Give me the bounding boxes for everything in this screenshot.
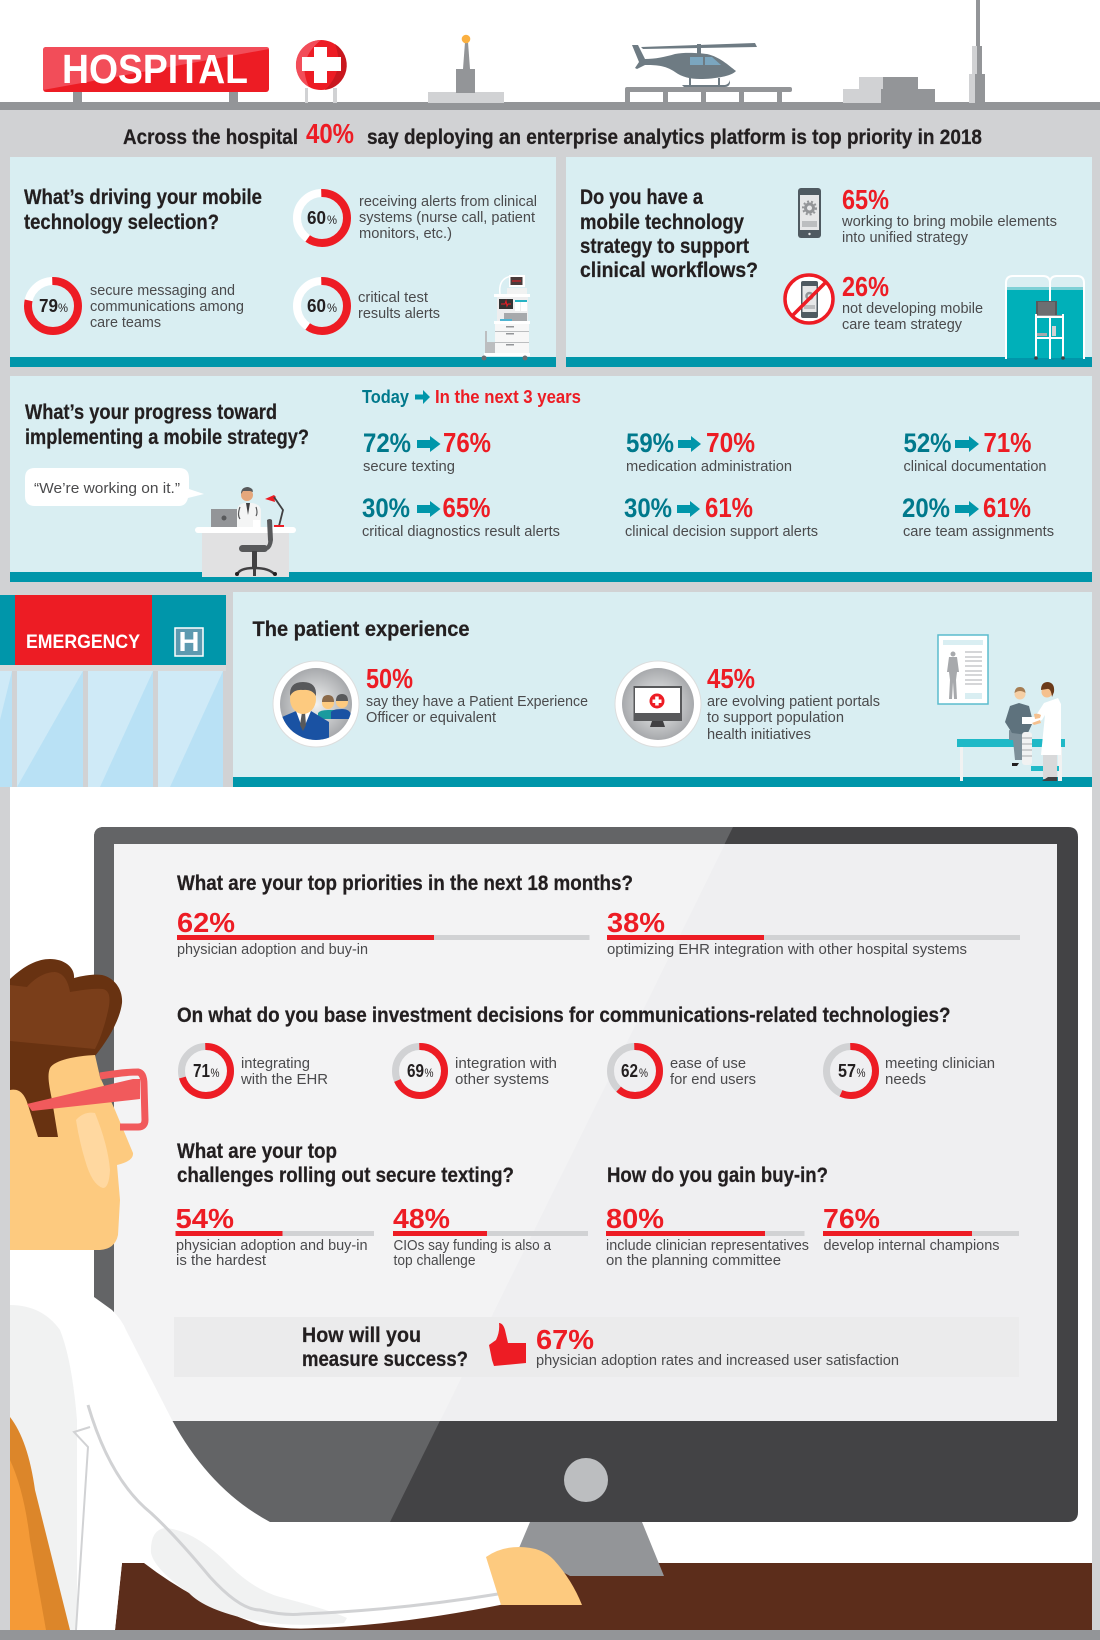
monitor <box>94 827 1078 1522</box>
stat: decision support alerts: 61% <box>705 492 753 523</box>
stat: 26%: not developing mobile <box>842 300 983 317</box>
stat: 26% <box>842 271 983 333</box>
stat: clinical documentation: 52% <box>904 428 952 458</box>
hair <box>10 959 122 1140</box>
text: critical test results <box>358 289 440 322</box>
icon: red cross sign <box>296 40 347 103</box>
section: investment decisions <box>177 1004 995 1096</box>
stat bar: 48% <box>393 1203 588 1269</box>
stat bar: 48%: 48% <box>393 1203 450 1234</box>
icon: camera dot <box>564 1458 608 1502</box>
stat: decision support alerts: clinical decision support alerts <box>625 523 818 540</box>
callout: measuring success: measure success? <box>302 1348 468 1371</box>
donut: 60% test results: 60 <box>307 296 326 316</box>
text: clinical system alerts: receiving alerts from clinical <box>359 193 537 210</box>
stat: medication administration: 70% <box>706 427 755 458</box>
stat bar: 54%: physician adoption and buy-in <box>176 1237 368 1254</box>
callout: measuring success <box>174 1317 1019 1377</box>
section: secure texting challenges: What are your top <box>177 1140 337 1163</box>
stat: medication administration: medication administration <box>626 458 792 475</box>
legend: today to next 3 years: Today <box>362 387 409 407</box>
panel: mobile technology strategy <box>566 157 1092 367</box>
donut: 69%: % <box>424 1066 434 1080</box>
stat bar: 80%: on the planning committee <box>606 1252 781 1269</box>
stat: medication administration <box>626 427 792 475</box>
text: secure messaging: communications among <box>90 298 244 315</box>
monitor stand <box>519 1522 664 1576</box>
donut: 71% <box>182 1046 230 1096</box>
emergency entrance <box>0 595 226 787</box>
text: clinical system alerts <box>359 193 537 242</box>
stat: 45%: 45% <box>707 663 755 694</box>
stat: care team assignments: care team assignments <box>903 523 1054 540</box>
donut: 60% alerts: 60 <box>307 208 326 228</box>
emergency entrance: EMERGENCY <box>26 632 140 653</box>
cheek highlight <box>76 1113 110 1188</box>
stat bar: 54%: is the hardest <box>176 1252 267 1269</box>
label: integrating with the EHR: integrating <box>241 1055 310 1072</box>
donut: 57%: % <box>856 1066 866 1080</box>
stat: care team assignments: 61% <box>983 492 1031 523</box>
title: 40% <box>306 118 354 149</box>
illustration: doctor viewing the monitor <box>10 959 582 1630</box>
section: investment decisions: On what do you base investment decisions for communications-related technologies? <box>177 1004 950 1027</box>
heading <box>24 186 262 234</box>
label: meeting clinician needs <box>885 1055 995 1088</box>
text: secure messaging: care teams <box>90 314 161 331</box>
glasses <box>27 1072 145 1127</box>
text: clinical system alerts: systems (nurse call, patient <box>359 209 536 226</box>
section: gaining buy-in <box>606 1164 1019 1269</box>
section: secure texting challenges <box>176 1140 588 1269</box>
stat: clinical documentation <box>904 427 1046 475</box>
stat: clinical documentation: clinical documentation <box>904 458 1046 475</box>
skyline: buildings <box>843 77 935 103</box>
icon: patient portal monitor <box>615 661 701 747</box>
icon: crossed-out smartphone <box>785 275 833 323</box>
stat: 50%: Officer or equivalent <box>366 709 497 726</box>
donut: 69%: 69 <box>407 1061 424 1081</box>
donut: 79% messaging: % <box>58 301 68 315</box>
panel: mobile technology selection <box>10 157 556 367</box>
donut: 62%: 62 <box>621 1061 638 1081</box>
stat bar: 80%: include clinician representatives <box>606 1237 809 1254</box>
stat: 65%: into unified strategy <box>842 229 968 246</box>
donut: 69% <box>396 1046 444 1096</box>
stat: 50% <box>366 663 588 726</box>
text: secure messaging <box>90 282 244 331</box>
stat bar: 62% <box>177 907 590 958</box>
label: ease of use for end users: for end users <box>670 1071 756 1088</box>
stat: diagnostics alerts <box>362 492 560 540</box>
heading: The patient experience <box>252 618 470 641</box>
stat: secure texting: 76% <box>443 427 491 458</box>
heading: What’s your progress toward <box>25 401 277 424</box>
panel: progress toward mobile strategy <box>10 376 1092 582</box>
speech bubble: “We’re working on it.” <box>34 480 180 497</box>
label: integration with other systems: integration with <box>455 1055 557 1072</box>
skyline: helipad with helicopter <box>625 43 792 103</box>
stat: decision support alerts: 30% <box>624 493 672 523</box>
panel: patient experience <box>233 592 1092 787</box>
label: integration with other systems <box>455 1055 557 1088</box>
stat: 50%: 50% <box>366 663 413 694</box>
illustration: anatomy poster <box>938 635 988 704</box>
head and neck <box>10 1055 133 1250</box>
donut: 57%: 57 <box>838 1061 856 1081</box>
stat: 65%: 65% <box>842 184 889 215</box>
heading: technology selection? <box>24 211 219 234</box>
heading <box>580 186 758 282</box>
stat: diagnostics alerts: 65% <box>442 492 491 523</box>
stat bar: 48%: CIOs say funding is also a <box>394 1237 552 1254</box>
stat: diagnostics alerts: 30% <box>362 493 410 523</box>
stat bar: 38%: optimizing EHR integration with other hospital systems <box>607 941 967 958</box>
icon: anesthesia cart <box>482 275 530 360</box>
stat: 26%: care team strategy <box>842 316 962 333</box>
icon: curtain and equipment table <box>1006 276 1084 360</box>
stat: 50%: say they have a Patient Experience <box>366 693 588 710</box>
icon: executives in circle <box>273 661 359 747</box>
title <box>123 118 982 149</box>
title: Across the hospital <box>123 126 298 149</box>
stat: 45%: health initiatives <box>707 726 811 743</box>
stat bar: 80%: 80% <box>606 1203 664 1234</box>
label: integrating with the EHR <box>240 1055 328 1088</box>
skyline: mast <box>969 0 985 103</box>
heading: strategy to support <box>580 235 749 258</box>
donut: 60% test results <box>297 281 347 331</box>
stat: 67%: physician adoption rates and increased user satisfaction <box>536 1352 899 1369</box>
stat bar: 38% <box>607 907 1020 958</box>
stat: secure texting <box>363 427 491 475</box>
stat: secure texting: secure texting <box>363 458 455 475</box>
donut: 57% <box>826 1046 876 1096</box>
section: top priorities <box>177 872 1020 958</box>
stat: 45%: are evolving patient portals <box>707 693 880 710</box>
text: critical test results: results alerts <box>358 305 440 322</box>
label: ease of use for end users: ease of use <box>670 1055 746 1072</box>
section: top priorities: What are your top priorities in the next 18 months? <box>177 872 633 895</box>
stat: medication administration: 59% <box>626 428 674 458</box>
skyline: antenna tower <box>428 35 504 103</box>
donut: 60% alerts <box>297 193 347 243</box>
callout: measuring success: How will you <box>302 1324 421 1347</box>
stat: 45% <box>707 663 880 743</box>
text: clinical system alerts: monitors, etc.) <box>359 225 452 242</box>
heading: Do you have a <box>580 186 703 209</box>
donut: 62%: % <box>639 1066 648 1080</box>
skyline: ground strip <box>0 102 1100 110</box>
stat: 65% <box>841 184 1057 246</box>
legend: today to next 3 years: In the next 3 years <box>435 387 581 407</box>
legend: today to next 3 years <box>362 387 581 407</box>
stat bar: 62%: physician adoption and buy-in <box>177 941 368 958</box>
stat: diagnostics alerts: critical diagnostics result alerts <box>362 523 560 540</box>
stat bar: 76% <box>823 1203 1019 1254</box>
white lower area <box>10 787 1092 1630</box>
emergency entrance: H <box>178 626 200 657</box>
stat bar: 38%: 38% <box>607 907 665 938</box>
label: integration with other systems: other systems <box>455 1071 549 1088</box>
stat: clinical documentation: 71% <box>984 427 1032 458</box>
donut: 79% messaging: 79 <box>39 296 58 316</box>
lab coat <box>10 1250 505 1630</box>
stat: 45%: to support population <box>707 709 844 726</box>
text: critical test results: critical test <box>358 289 429 306</box>
monitor screen <box>114 844 1057 1421</box>
illustration: doctor and patient <box>957 682 1065 781</box>
stat: 65%: working to bring mobile elements <box>841 213 1057 230</box>
stat: 67% <box>536 1324 899 1369</box>
stat bar: 54%: 54% <box>176 1203 234 1234</box>
bottom strip <box>0 1630 1100 1640</box>
stat bar: 76%: 76% <box>823 1203 880 1234</box>
donut: 60% alerts: % <box>327 213 337 227</box>
heading: clinical workflows? <box>580 259 758 282</box>
stat bar: 48%: top challenge <box>394 1252 476 1269</box>
icon: smartphone with gear <box>798 188 821 238</box>
stat: care team assignments <box>902 492 1054 540</box>
stat bar: 76%: develop internal champions <box>824 1237 1000 1254</box>
hand <box>486 1547 582 1605</box>
desk <box>115 1563 1092 1630</box>
donut: 71%: % <box>210 1066 220 1080</box>
title: say deploying an enterprise analytics platform is top priority in 2018 <box>367 126 982 149</box>
heading: mobile technology <box>580 211 744 234</box>
chair <box>10 1417 70 1630</box>
label: meeting clinician needs: needs <box>885 1071 926 1088</box>
donut: 71%: 71 <box>193 1061 210 1081</box>
stat bar: 80% <box>606 1203 809 1269</box>
stat bar: 62%: 62% <box>177 907 235 938</box>
speech bubble <box>25 468 204 506</box>
stat: secure texting: 72% <box>363 428 411 458</box>
label: ease of use for end users <box>670 1055 756 1088</box>
hospital sign: HOSPITAL <box>62 46 248 92</box>
heading: What’s driving your mobile <box>24 186 262 209</box>
donut: 62% <box>610 1046 660 1096</box>
icon: thumbs up <box>489 1323 526 1366</box>
text: secure messaging: secure messaging and <box>90 282 235 299</box>
heading: implementing a mobile strategy? <box>25 426 309 449</box>
donut: 79% messaging <box>28 281 78 331</box>
section: gaining buy-in: How do you gain buy-in? <box>607 1164 828 1187</box>
heading <box>25 401 309 449</box>
stat bar: 54% <box>176 1203 374 1269</box>
donut: 60% test results: % <box>327 301 337 315</box>
illustration: doctor at desk <box>195 487 296 577</box>
stat: 67%: 67% <box>536 1324 594 1355</box>
stat: 26%: 26% <box>842 271 889 302</box>
stat: care team assignments: 20% <box>902 493 950 523</box>
stat: decision support alerts <box>624 492 818 540</box>
label: meeting clinician needs: meeting clinician <box>885 1055 995 1072</box>
section: secure texting challenges: challenges rolling out secure texting? <box>177 1164 514 1187</box>
label: integrating with the EHR: with the EHR <box>240 1071 328 1088</box>
